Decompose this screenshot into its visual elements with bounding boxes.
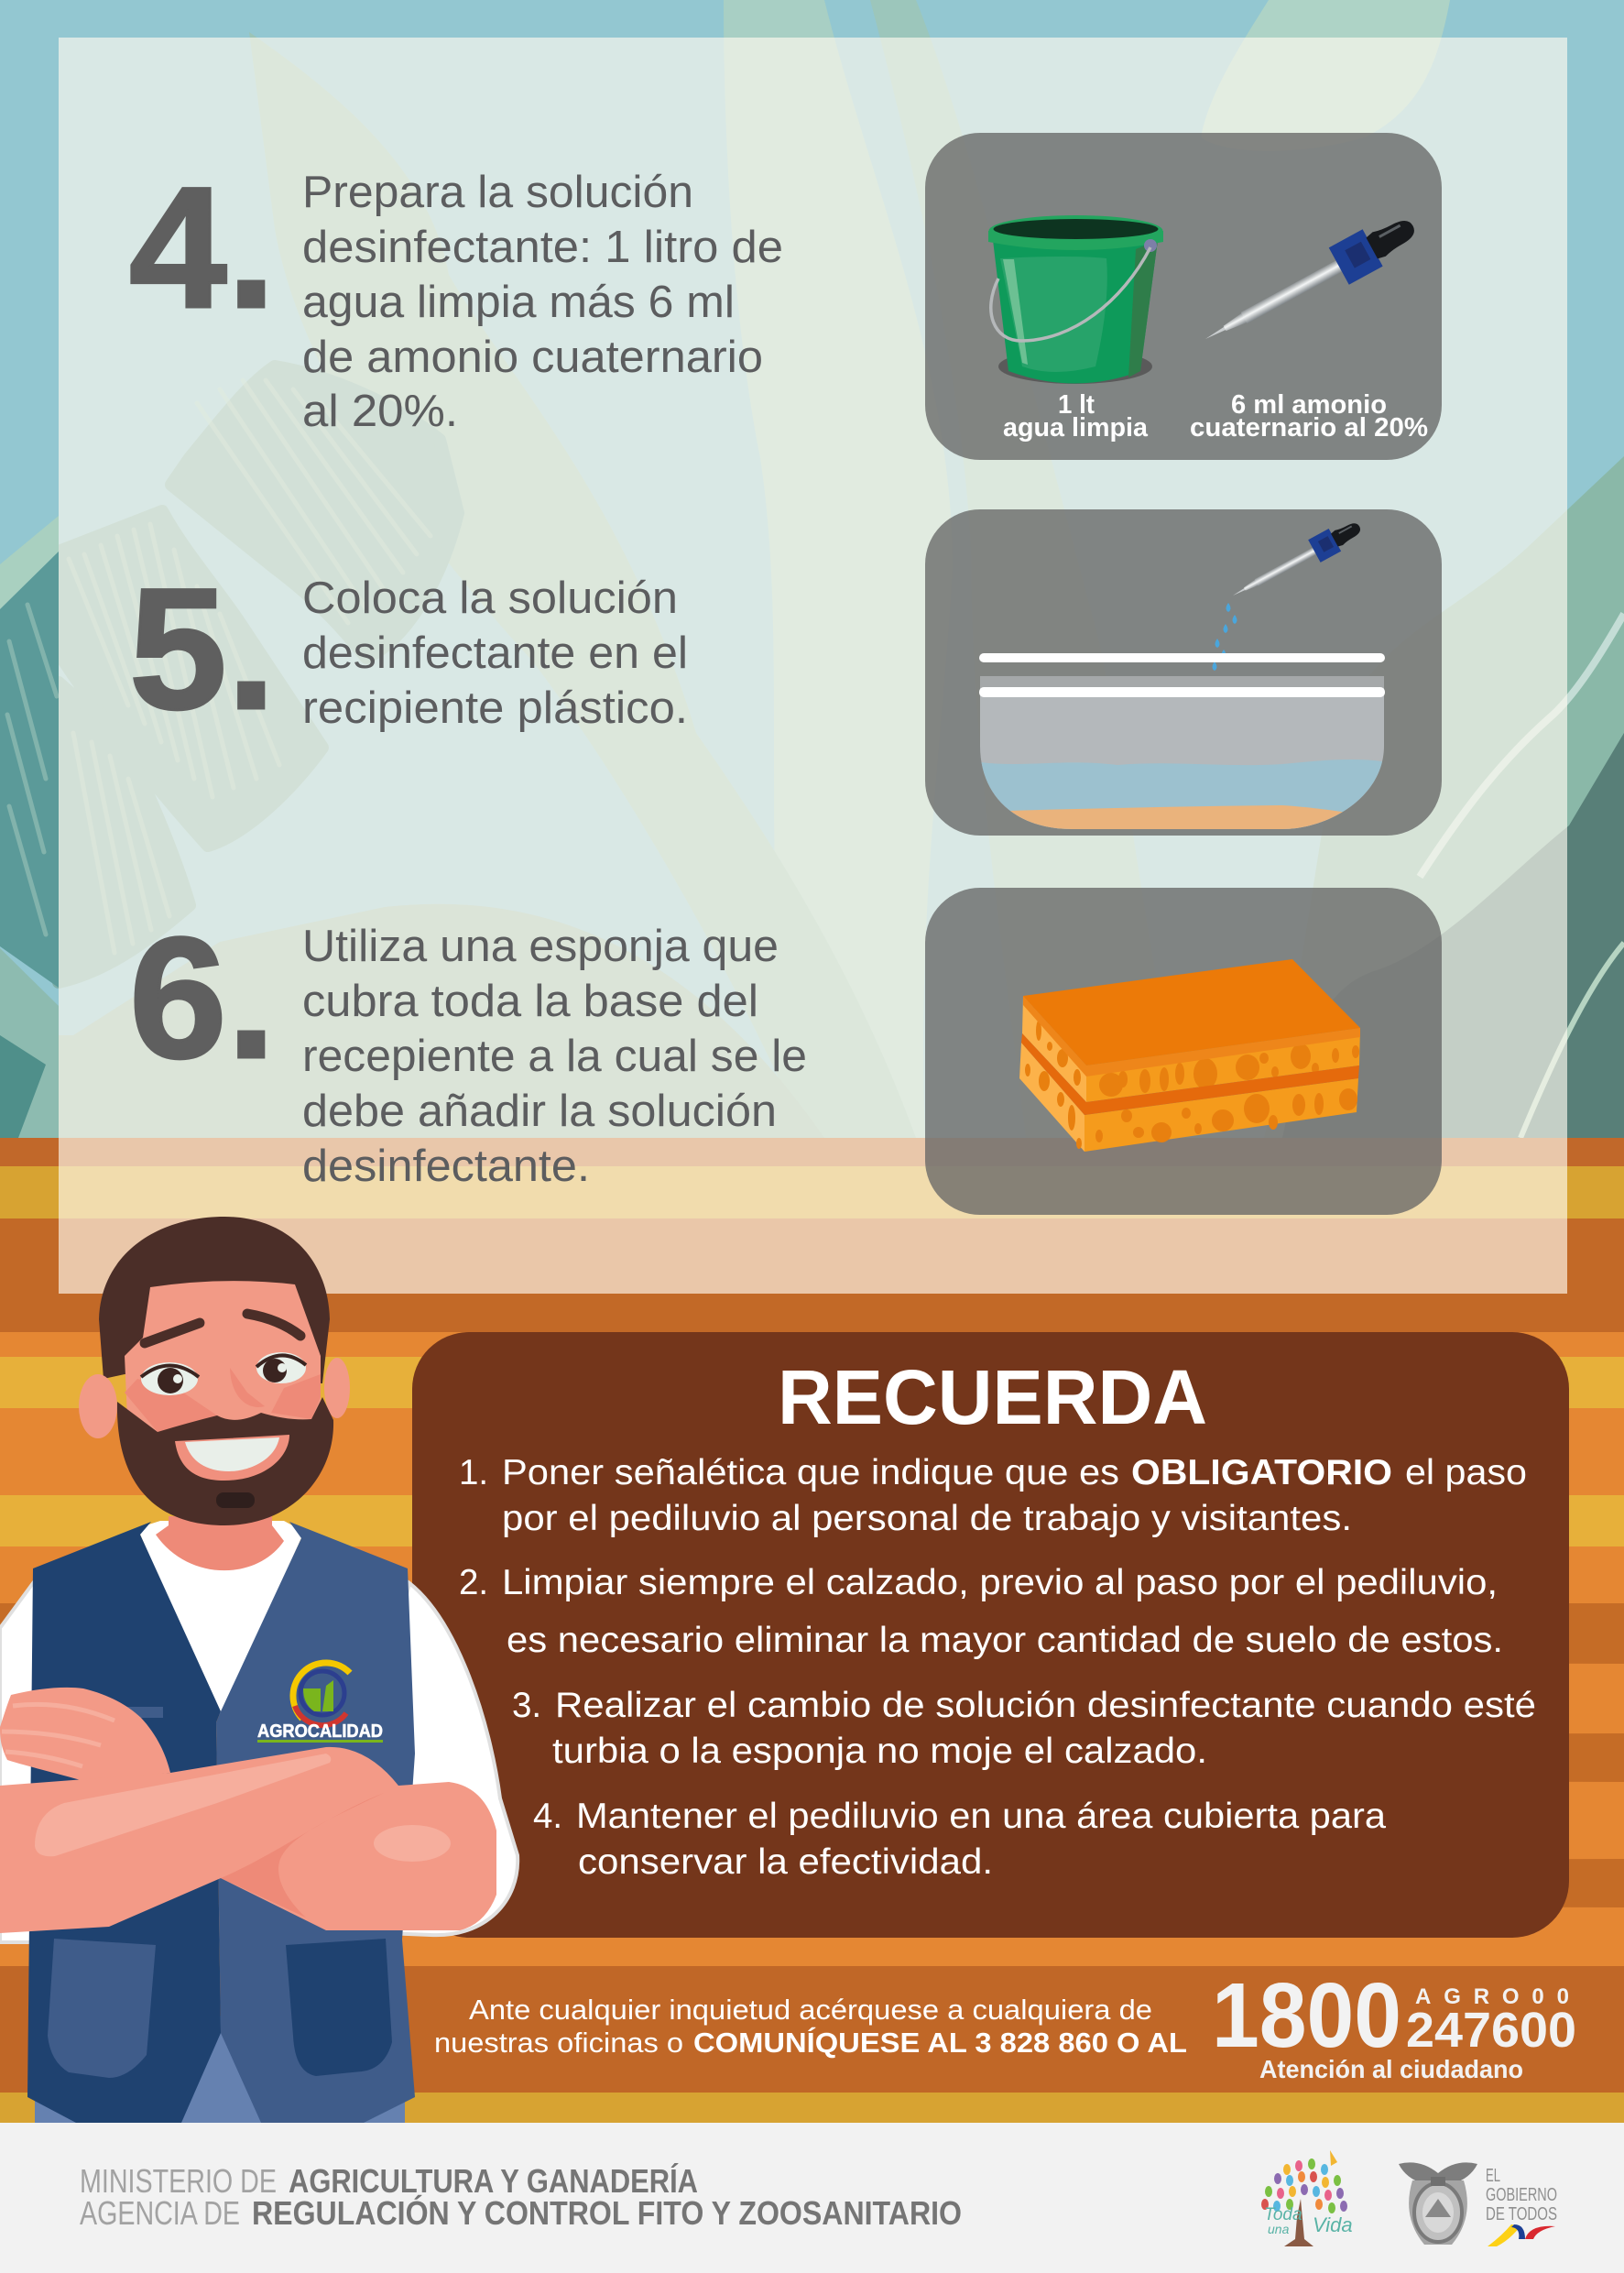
step 4 text: agua limpia más 6 ml xyxy=(302,278,735,327)
item 1: por el pediluvio al personal de trabajo y visitantes. xyxy=(502,1499,1352,1538)
logo: Ecuador coat of arms xyxy=(1399,2162,1477,2245)
footer: ministry names: AGENCIA DE xyxy=(80,2194,240,2232)
logo: Toda una Vida tree: Toda xyxy=(1264,2205,1302,2224)
step 5 text xyxy=(302,574,688,733)
logo: El Gobierno de Todos xyxy=(1486,2166,1557,2246)
step 5 text: desinfectante en el xyxy=(302,628,688,678)
phone number 1800 AGRO00 247600: 1800 xyxy=(1212,1964,1401,2067)
item 2: es necesario eliminar la mayor cantidad de suelo de estos. xyxy=(507,1621,1503,1660)
illustration: man with vest and crossed arms xyxy=(0,1217,518,2123)
item 4: 4. xyxy=(533,1797,562,1836)
step 4 text: al 20%. xyxy=(302,387,458,436)
vest left xyxy=(27,1522,221,2123)
card: basin with drops xyxy=(925,509,1442,836)
item 1: OBLIGATORIO xyxy=(1131,1453,1392,1492)
item 1: 1. xyxy=(459,1453,488,1492)
item 2 xyxy=(459,1563,1503,1660)
icon: falling drops xyxy=(1213,603,1237,671)
background: teal sky xyxy=(0,0,1624,1138)
trousers xyxy=(35,2016,405,2123)
logo: El Gobierno de Todos: GOBIERNO xyxy=(1486,2185,1557,2205)
label: 6 ml amonio cuaternario al 20% xyxy=(1190,390,1428,443)
contact text xyxy=(434,1994,1187,2059)
item 1: el paso xyxy=(1405,1453,1527,1492)
crossed arms xyxy=(0,1688,496,1933)
vest pockets xyxy=(48,1939,392,2078)
item 3 xyxy=(512,1686,1536,1771)
step 4 text: desinfectante: 1 litro de xyxy=(302,223,783,272)
item 3: turbia o la esponja no moje el calzado. xyxy=(552,1732,1207,1771)
beard xyxy=(117,1397,333,1525)
background: tropical leaves xyxy=(0,0,1624,1138)
item 1 xyxy=(459,1453,1527,1538)
vest pocket bar xyxy=(109,1707,163,1718)
footer: ministry names: MINISTERIO DE xyxy=(80,2162,277,2200)
right sleeve xyxy=(385,1583,518,1935)
footer: ministry names: AGRICULTURA Y GANADERÍA xyxy=(289,2162,698,2200)
item 4 xyxy=(533,1797,1387,1882)
icon: green bucket xyxy=(988,215,1163,384)
icon: dropper xyxy=(1195,207,1423,357)
cheeks and nose xyxy=(125,1368,321,1432)
step 4 xyxy=(129,151,783,436)
phone number 1800 AGRO00 247600: AGRO00 xyxy=(1415,1984,1569,2009)
vest right xyxy=(216,1522,415,2123)
item 4: conservar la efectividad. xyxy=(578,1842,993,1882)
Agrocalidad logo: AGROCALIDAD xyxy=(257,1721,383,1742)
logo: Toda una Vida tree: una xyxy=(1268,2222,1290,2236)
label: 6 ml amonio cuaternario al 20%: 6 ml amonio xyxy=(1231,390,1387,420)
label: 1 lt agua limpia xyxy=(1003,390,1149,443)
step 6 text xyxy=(302,922,807,1191)
contact text: Ante cualquier inquietud acérquese a cualquiera de xyxy=(469,1994,1152,2026)
illustration: plastic basin xyxy=(979,653,1388,834)
mouth xyxy=(175,1435,289,1481)
label: 1 lt agua limpia: agua limpia xyxy=(1003,413,1149,443)
step 6 text: cubra toda la base del xyxy=(302,977,758,1026)
hair xyxy=(99,1217,330,1383)
eyebrows xyxy=(145,1314,300,1343)
step 4 number: 4. xyxy=(129,151,276,344)
item 3: 3. xyxy=(512,1686,541,1725)
eyes xyxy=(141,1352,306,1395)
ears xyxy=(79,1358,350,1438)
item 3: Realizar el cambio de solución desinfectante cuando esté xyxy=(555,1686,1536,1725)
Agrocalidad logo xyxy=(257,1663,383,1743)
phone number 1800 AGRO00 247600: 247600 xyxy=(1406,2003,1576,2058)
item 2: 2. xyxy=(459,1563,488,1602)
step 4 text xyxy=(302,168,783,436)
step 6 text: debe añadir la solución xyxy=(302,1087,777,1136)
card: sponge xyxy=(925,888,1442,1215)
step 6 text: recepiente a la cual se le xyxy=(302,1032,807,1081)
footer band xyxy=(0,2123,1624,2273)
footer: ministry names xyxy=(80,2162,962,2232)
step 5 number: 5. xyxy=(129,552,276,745)
item 4: Mantener el pediluvio en una área cubierta para xyxy=(576,1797,1387,1836)
heading: RECUERDA: RECUERDA xyxy=(778,1354,1207,1440)
icon: orange sponge xyxy=(1019,959,1360,1152)
logo: Toda una Vida tree: Vida xyxy=(1313,2213,1353,2236)
step 6 xyxy=(129,902,807,1191)
shirt xyxy=(137,1521,304,1718)
panel: RECUERDA xyxy=(412,1332,1569,1938)
icon: small dropper xyxy=(1226,515,1366,606)
step 4 text: de amonio cuaternario xyxy=(302,333,763,382)
neck xyxy=(156,1516,284,1570)
left sleeve xyxy=(0,1583,110,1942)
step 4 text: Prepara la solución xyxy=(302,168,693,217)
background: orange wood stripes xyxy=(0,1138,1624,2123)
logo: El Gobierno de Todos: DE TODOS xyxy=(1486,2204,1557,2224)
face xyxy=(125,1281,321,1438)
logo: El Gobierno de Todos: EL xyxy=(1486,2166,1500,2186)
card: bucket and dropper xyxy=(925,133,1442,460)
contact text: COMUNÍQUESE AL 3 828 860 O AL xyxy=(693,2027,1187,2059)
footer: ministry names: REGULACIÓN Y CONTROL FITO Y ZOOSANITARIO xyxy=(252,2193,962,2232)
step 6 number: 6. xyxy=(129,902,276,1094)
label: 6 ml amonio cuaternario al 20%: cuaternario al 20% xyxy=(1190,413,1428,443)
step 6 text: desinfectante. xyxy=(302,1142,590,1191)
translucent white panel xyxy=(59,38,1567,1294)
contact text: nuestras oficinas o xyxy=(434,2027,683,2059)
item 1: Poner señalética que indique que es xyxy=(502,1453,1119,1492)
item 2: Limpiar siempre el calzado, previo al paso por el pediluvio, xyxy=(502,1563,1498,1602)
goatee patch xyxy=(216,1492,255,1508)
step 5 text: recipiente plástico. xyxy=(302,683,688,733)
step 5 xyxy=(129,552,688,745)
step 6 text: Utiliza una esponja que xyxy=(302,922,779,971)
phone number 1800 AGRO00 247600: Atención al ciudadano xyxy=(1259,2055,1523,2083)
phone number 1800 AGRO00 247600 xyxy=(1212,1964,1576,2083)
logo: Toda una Vida tree xyxy=(1261,2150,1353,2246)
label: 1 lt agua limpia: 1 lt xyxy=(1058,390,1095,420)
step 5 text: Coloca la solución xyxy=(302,574,678,623)
